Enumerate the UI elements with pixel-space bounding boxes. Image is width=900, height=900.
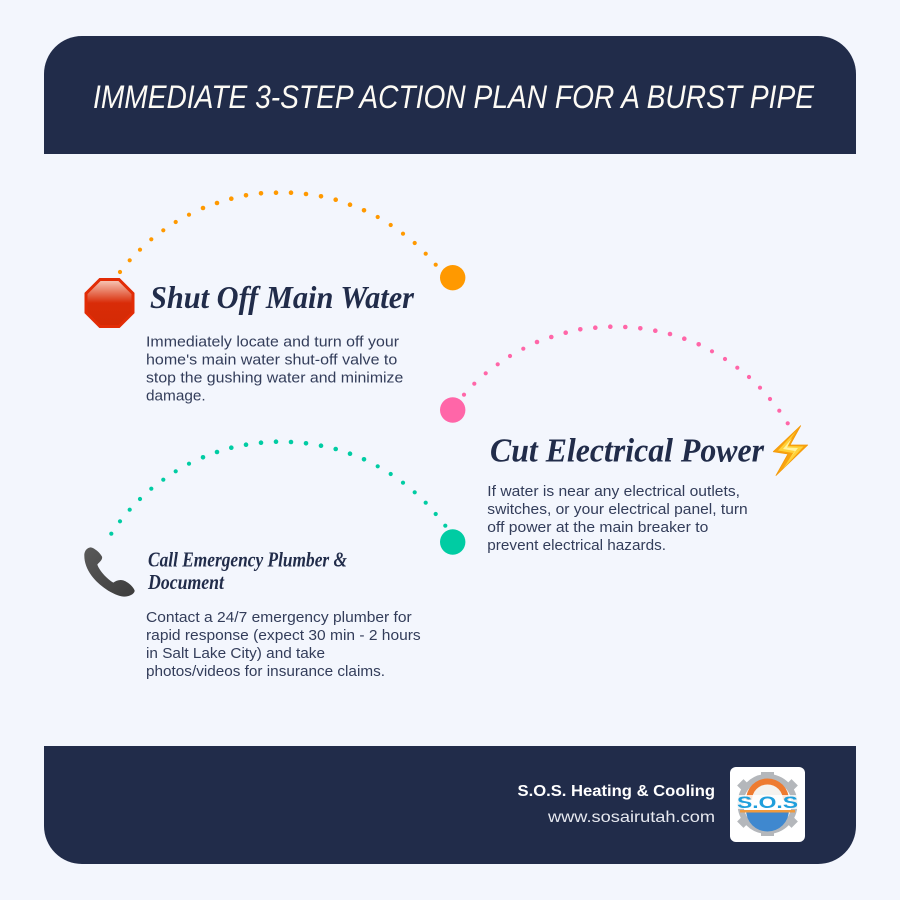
footer website: www.sosairutah.com [547, 809, 715, 826]
step 1: shut off main water [86, 190, 465, 405]
text: shut off description [146, 335, 403, 405]
icon: lightning bolt [773, 426, 808, 476]
header banner [44, 36, 856, 154]
heading: shut off main water: Shut Off Main Water [150, 279, 415, 315]
step 3: call emergency plumber [84, 439, 465, 680]
footer banner [44, 746, 856, 864]
heading: call emergency plumber and document [147, 548, 348, 594]
text: plumber description [146, 610, 421, 680]
logo badge [730, 767, 805, 842]
logo badge: S.O.S [737, 793, 798, 812]
dotted arc: teal [109, 439, 447, 536]
footer company name: S.O.S. Heating & Cooling [518, 783, 715, 800]
icon: stop sign [86, 280, 133, 326]
text: plumber description: in Salt Lake City) and take [146, 646, 325, 662]
icon: telephone handset [84, 547, 135, 597]
dotted arc: orange [118, 190, 438, 274]
dotted arc: pink [462, 324, 790, 425]
step 2: cut electrical power [440, 324, 808, 554]
node: pink [440, 397, 465, 423]
text: plumber description: rapid response (expect 30 min - 2 hours [146, 628, 421, 644]
text: plumber description: photos/videos for insurance claims. [146, 664, 385, 680]
text: electrical description: If water is near any electrical outlets, [487, 484, 740, 500]
text: shut off description: Immediately locate and turn off your [146, 335, 399, 351]
text: electrical description: switches, or your electrical panel, turn [487, 502, 748, 518]
node: orange [440, 265, 465, 290]
text: electrical description: prevent electrical hazards. [487, 538, 666, 554]
heading: call emergency plumber and document: Call Emergency Plumber & [148, 548, 348, 572]
node: teal [440, 529, 465, 555]
text: shut off description: home's main water shut-off valve to [146, 353, 397, 369]
text: shut off description: damage. [146, 389, 206, 405]
text: shut off description: stop the gushing water and minimize [146, 371, 403, 387]
text: electrical description: off power at the main breaker to [487, 520, 708, 536]
text: electrical description [487, 484, 748, 554]
text: plumber description: Contact a 24/7 emergency plumber for [146, 610, 412, 626]
heading: cut electrical power: Cut Electrical Power [490, 433, 765, 470]
title: IMMEDIATE 3-STEP ACTION PLAN FOR A BURST PIPE [93, 79, 815, 115]
heading: call emergency plumber and document: Document [147, 570, 225, 594]
